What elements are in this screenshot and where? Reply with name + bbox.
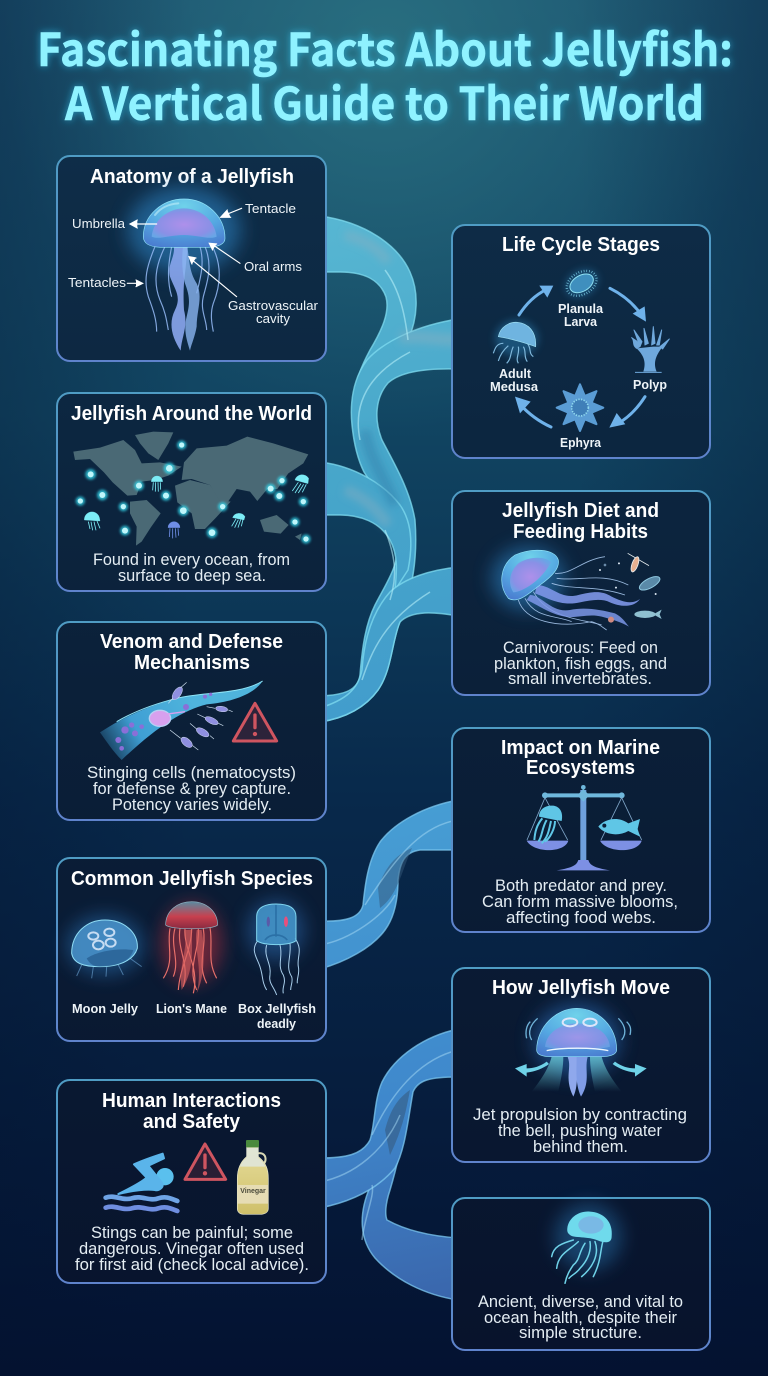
heading: world: Jellyfish Around the World: [71, 403, 312, 425]
label: tentacles: Tentacles: [68, 275, 127, 290]
text: movement: behind them.: [533, 1138, 628, 1156]
label: gastrovascular cavity: cavity: [256, 311, 291, 326]
panel: species: [57, 858, 326, 1041]
text: impact: affecting food webs.: [506, 909, 656, 927]
panel: anatomy: [57, 156, 326, 361]
heading: life cycle: Life Cycle Stages: [502, 234, 660, 256]
icon: ephyra: [557, 384, 603, 431]
world map with jellyfish markers: [73, 432, 311, 546]
label: planula larva: Planula: [558, 301, 604, 316]
icon: jellyfish silhouette: [534, 806, 562, 843]
text: diet: plankton, fish eggs, and: [494, 655, 667, 673]
text: world: Found in every ocean, from: [93, 551, 290, 569]
icon: planula: [560, 264, 603, 303]
icon: plankton prey: [637, 574, 662, 593]
arrows: water push: [515, 1062, 647, 1077]
text: human: [75, 1224, 309, 1274]
connector ribbons: lower group: [320, 800, 458, 1300]
icon: feeding jellyfish: [492, 547, 640, 630]
icon: swimmer: [106, 1154, 177, 1211]
text: impact: [482, 877, 678, 927]
panel: ecosystem impact: [452, 728, 710, 932]
heading: human: and Safety: [143, 1111, 241, 1133]
icon: moon jelly: [67, 915, 143, 978]
text: conclusion: ocean health, despite their: [484, 1309, 677, 1327]
icon: pulsing jellyfish: [526, 1003, 631, 1097]
icon: polyp: [632, 327, 669, 372]
icon: shrimp prey: [628, 553, 649, 573]
title: [37, 14, 733, 133]
heading: impact: Impact on Marine: [501, 737, 660, 759]
heading: human: [102, 1090, 281, 1133]
text: human: dangerous. Vinegar often used: [79, 1240, 304, 1258]
icon: glowing jellyfish: [552, 1203, 622, 1283]
text: diet: [494, 639, 667, 688]
icon: tentacle with stinging cells: [100, 681, 277, 760]
text: movement: Jet propulsion by contracting: [473, 1106, 687, 1124]
label: moon jelly: Moon Jelly: [72, 1001, 139, 1016]
text: conclusion: Ancient, diverse, and vital to: [478, 1293, 683, 1311]
panel: venom: [57, 622, 326, 820]
title: Fascinating Facts About Jellyfish:: [37, 14, 733, 79]
text: venom: Potency varies widely.: [112, 796, 272, 814]
heading: movement: How Jellyfish Move: [492, 977, 670, 999]
heading: diet: [502, 500, 659, 543]
label: polyp: Polyp: [633, 377, 667, 392]
text: impact: Can form massive blooms,: [482, 893, 678, 911]
heading: species: Common Jellyfish Species: [71, 868, 313, 890]
heading: human: Human Interactions: [102, 1090, 281, 1112]
label: adult medusa: Medusa: [490, 379, 539, 394]
panel: around the world: [57, 393, 326, 591]
text: world: [93, 551, 290, 585]
text: human: Stings can be painful; some: [91, 1224, 293, 1242]
text: movement: [473, 1106, 687, 1156]
panel: human interactions: [57, 1080, 326, 1283]
label: lion's mane: Lion's Mane: [156, 1001, 227, 1016]
label: planula larva: Larva: [564, 314, 598, 329]
label: box jellyfish deadly: Box Jellyfish: [238, 1001, 316, 1016]
panel: movement: [452, 968, 710, 1162]
label: box jellyfish deadly: [238, 1001, 316, 1031]
icon: balance scale: [527, 785, 642, 870]
panel: life cycle: [452, 225, 710, 458]
heading: venom: [100, 631, 283, 674]
text: diet: Carnivorous: Feed on: [503, 639, 658, 657]
text: impact: Both predator and prey.: [495, 877, 667, 895]
heading: venom: Venom and Defense: [100, 631, 283, 653]
panel: diet: [452, 491, 710, 695]
icon: vinegar bottle: [237, 1140, 268, 1214]
label: oral arms: Oral arms: [244, 259, 303, 274]
text: movement: the bell, pushing water: [498, 1122, 662, 1140]
label: planula larva: [558, 301, 604, 329]
icon: box jellyfish: [248, 900, 304, 995]
label: gastrovascular cavity: [228, 298, 319, 326]
label: gastrovascular cavity: Gastrovascular: [228, 298, 319, 313]
text: diet: small invertebrates.: [508, 670, 652, 688]
label: umbrella: Umbrella: [72, 216, 126, 231]
heading: impact: [501, 737, 660, 779]
text: venom: for defense & prey capture.: [93, 780, 291, 798]
panel: conclusion: [452, 1198, 710, 1350]
text: conclusion: [478, 1293, 683, 1342]
cycle arrows: [515, 286, 646, 428]
heading: impact: Ecosystems: [526, 757, 635, 779]
label: box jellyfish deadly: deadly: [257, 1016, 297, 1031]
heading: diet: Jellyfish Diet and: [502, 500, 659, 522]
icon: labelled jellyfish: [127, 187, 242, 351]
heading: diet: Feeding Habits: [513, 521, 648, 543]
food particles: [599, 562, 657, 623]
icon: adult medusa: [493, 320, 538, 363]
label: ephyra: Ephyra: [560, 435, 602, 450]
heading: anatomy: Anatomy of a Jellyfish: [90, 166, 294, 188]
icon: lion's mane: [162, 902, 222, 993]
label: adult medusa: Adult: [499, 366, 532, 381]
connector ribbons: upper group: [320, 216, 458, 722]
text: venom: Stinging cells (nematocysts): [87, 764, 296, 782]
title: A Vertical Guide to Their World: [64, 68, 704, 133]
icon: fish silhouette: [598, 819, 640, 837]
heading: venom: Mechanisms: [134, 652, 250, 674]
icon: fish prey: [634, 610, 662, 619]
text: conclusion: simple structure.: [519, 1324, 642, 1342]
text: venom: [87, 764, 296, 814]
text: world: surface to deep sea.: [118, 567, 266, 585]
label: tentacle: Tentacle: [245, 201, 296, 216]
text: human: for first aid (check local advice).: [75, 1256, 309, 1274]
icon: warning triangle: [185, 1144, 226, 1179]
icon: vinegar bottle: Vinegar: [240, 1188, 266, 1195]
icon: warning triangle: [233, 703, 277, 741]
label: adult medusa: [490, 366, 539, 394]
